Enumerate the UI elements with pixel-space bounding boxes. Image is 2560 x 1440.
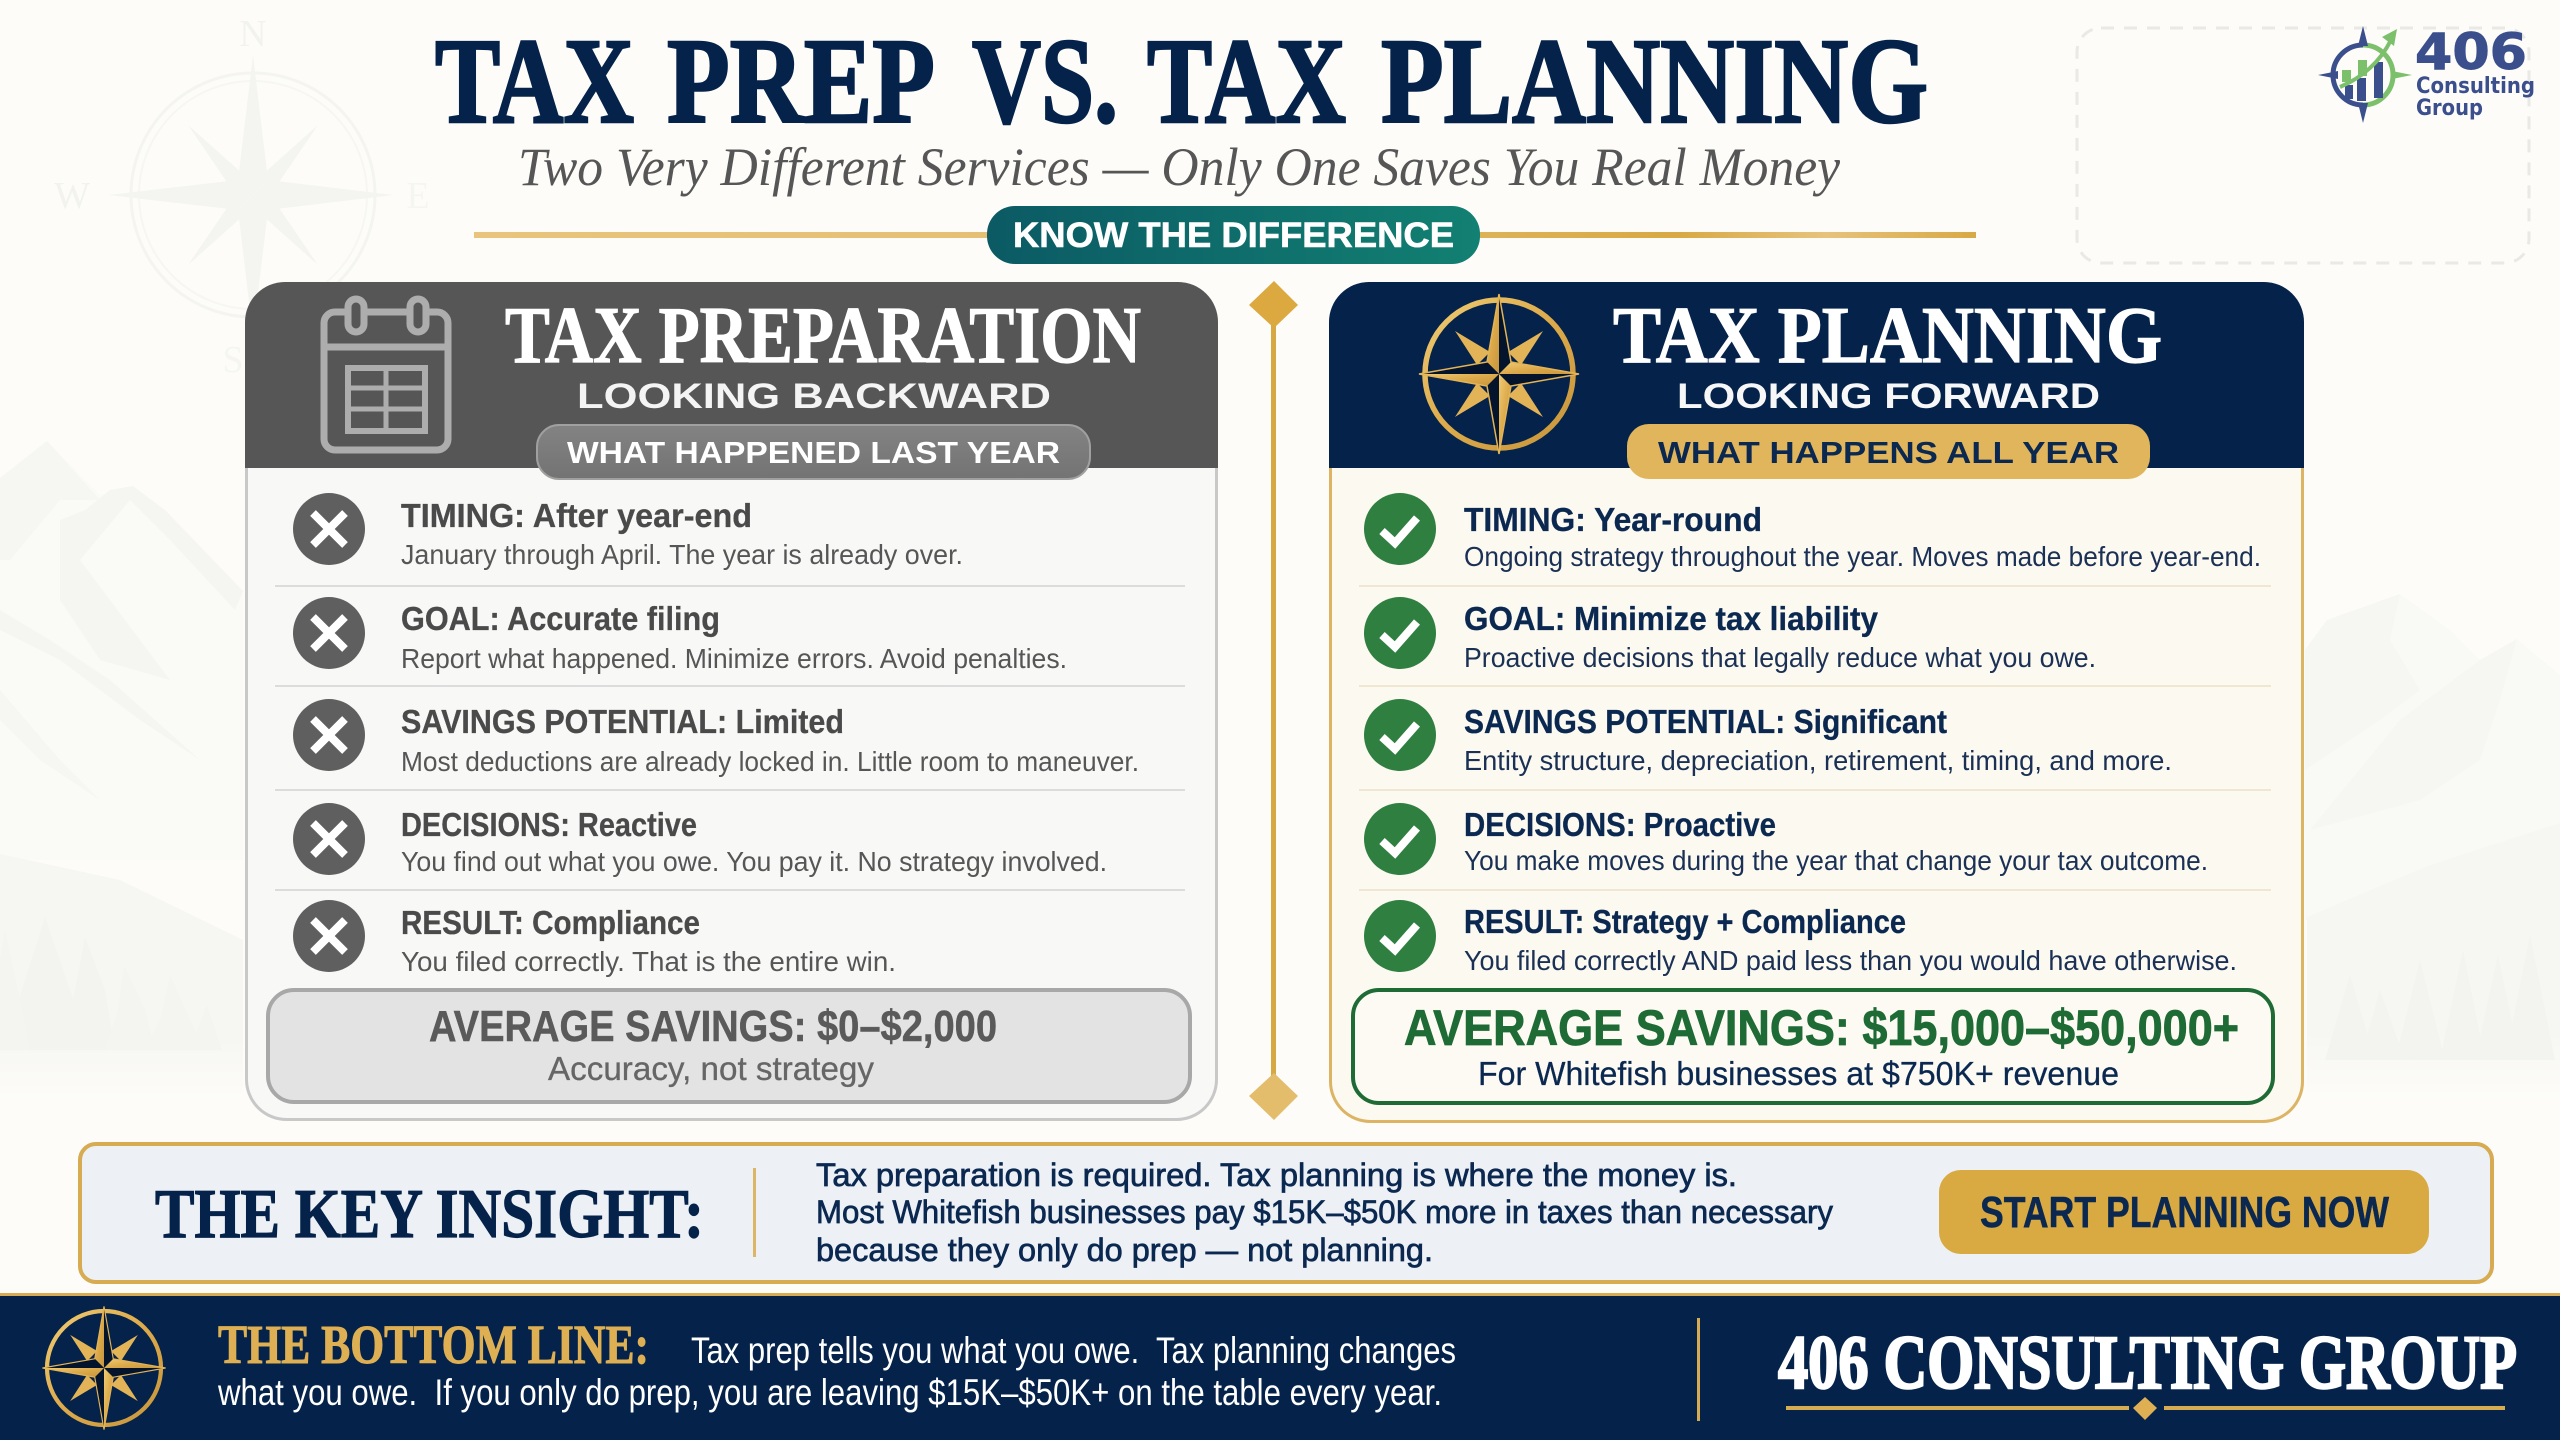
row: timing: January through April. The year is already over. [401, 539, 963, 570]
callout: average savings [1353, 990, 2273, 1103]
row: decisions: You find out what you owe. You pay it. No strategy involved. [401, 846, 1107, 877]
pill: what happens all year: WHAT HAPPENS ALL YEAR [1658, 435, 2119, 470]
heading: tax planning: TAX PLANNING [1613, 292, 2162, 380]
row: goal: Proactive decisions that legally reduce what you owe. [1464, 642, 2096, 673]
row: savings potential [293, 699, 1139, 777]
row: decisions: DECISIONS: Reactive [401, 806, 697, 843]
pill: what happened last year: WHAT HAPPENED LAST YEAR [567, 435, 1060, 470]
row: savings potential [1364, 699, 2172, 776]
row: savings potential: Most deductions are already locked in. Little room to maneuver. [401, 746, 1139, 777]
callout: average savings [268, 990, 1190, 1102]
center divider with diamonds [1249, 281, 1298, 1120]
row: savings potential: SAVINGS POTENTIAL: Limited [401, 703, 844, 740]
row: result [293, 900, 896, 977]
row: timing: TIMING: After year-end [401, 497, 752, 534]
logo: 406 Consulting Group: Group [2416, 96, 2483, 121]
logo: 406 Consulting Group: Consulting [2416, 74, 2535, 99]
text block: bottom line: Tax prep tells you what you owe. Tax planning changes [691, 1330, 1456, 1371]
divider rule with badge [474, 206, 1976, 264]
text block: insight: because they only do prep — not planning. [816, 1232, 1433, 1268]
row: result [1364, 900, 2237, 976]
row: result: You filed correctly. That is the entire win. [401, 946, 896, 977]
row: decisions: You make moves during the year that change your tax outcome. [1464, 845, 2208, 876]
callout: average savings: For Whitefish businesses at $750K+ revenue [1478, 1055, 2119, 1092]
logo: 406 Consulting Group [2318, 23, 2535, 123]
row: goal: GOAL: Accurate filing [401, 600, 720, 637]
button: start planning now [1939, 1170, 2429, 1254]
row: timing [293, 493, 963, 570]
watermark: compass: E [406, 175, 430, 217]
row: decisions: DECISIONS: Proactive [1464, 806, 1776, 843]
row: result: You filed correctly AND paid less than you would have otherwise. [1464, 945, 2237, 976]
icon: logo compass [2318, 26, 2412, 123]
panel body [246, 284, 1216, 1120]
title: PLANNING [1381, 14, 1928, 149]
panel: tax planning [1329, 282, 2304, 1122]
row: timing: Ongoing strategy throughout the year. Moves made before year-end. [1464, 541, 2261, 572]
callout: average savings: Accuracy, not strategy [548, 1050, 874, 1087]
icon: gold compass [1419, 294, 1579, 454]
icon: small gold compass [42, 1306, 166, 1430]
icon: calendar [324, 299, 448, 450]
divider [1697, 1318, 1700, 1421]
panel header [1329, 282, 2304, 479]
subtitle: Two Very Different Services — Only One Saves You Real Money [518, 137, 1840, 197]
subheading: looking backward: LOOKING BACKWARD [577, 377, 1051, 416]
empty dashed placeholder [2077, 28, 2529, 263]
title [435, 14, 1928, 149]
row: savings potential: Entity structure, depreciation, retirement, timing, and more. [1464, 745, 2172, 776]
text block: insight: Tax preparation is required. Tax planning is where the money is. [816, 1157, 1737, 1193]
panel body [1330, 284, 2302, 1122]
heading: the key insight: THE KEY INSIGHT: [155, 1176, 704, 1253]
title: TAX [435, 14, 634, 149]
text block: bottom line [217, 1330, 1456, 1413]
watermark: compass [54, 13, 430, 381]
subheading: looking forward: LOOKING FORWARD [1677, 377, 2100, 416]
panel header [245, 282, 1218, 479]
title: PREP [667, 14, 935, 149]
text block: insight: Most Whitefish businesses pay $15K–$50K more in taxes than necessary [816, 1194, 1833, 1230]
heading: tax preparation: TAX PREPARATION [505, 292, 1141, 380]
divider [753, 1168, 756, 1257]
panel: tax preparation [245, 282, 1218, 1120]
watermark: compass: S [222, 339, 244, 381]
logo: 406 Consulting Group: 406 [2415, 23, 2527, 81]
text block: insight [816, 1157, 1833, 1268]
callout: average savings: AVERAGE SAVINGS: $0–$2,000 [429, 1002, 997, 1051]
row: decisions [293, 803, 1107, 877]
panel: key insight [80, 1144, 2492, 1282]
pill: what happened last year [537, 425, 1090, 479]
row: result: RESULT: Compliance [401, 904, 700, 941]
row dividers [1359, 586, 2271, 890]
watermark: compass: N [239, 13, 267, 55]
row: timing: TIMING: Year-round [1464, 501, 1762, 538]
text block: bottom line: what you owe. If you only do prep, you are leaving $15K–$50K+ on the table every year. [217, 1372, 1442, 1413]
row: goal: Report what happened. Minimize errors. Avoid penalties. [401, 643, 1067, 674]
pill: what happens all year [1627, 424, 2150, 479]
title: VS. [972, 14, 1118, 149]
badge: know the difference [987, 206, 1480, 264]
watermark: left mountains [0, 441, 243, 1100]
row: result: RESULT: Strategy + Compliance [1464, 903, 1906, 940]
row dividers [275, 586, 1185, 890]
watermark: right mountains [2305, 594, 2560, 1100]
row: goal [293, 597, 1067, 674]
title: TAX [1147, 14, 1346, 149]
watermark: compass: W [54, 175, 90, 217]
button: start planning now: START PLANNING NOW [1980, 1188, 2389, 1237]
footer band [0, 1293, 2560, 1440]
row: goal: GOAL: Minimize tax liability [1464, 600, 1879, 637]
row: decisions [1364, 803, 2208, 876]
heading: the bottom line: THE BOTTOM LINE: [218, 1314, 649, 1375]
callout: average savings: AVERAGE SAVINGS: $15,000–$50,000+ [1404, 1000, 2239, 1056]
row: savings potential: SAVINGS POTENTIAL: Significant [1464, 703, 1947, 740]
badge: know the difference: KNOW THE DIFFERENCE [1013, 216, 1454, 255]
row: timing [1364, 493, 2261, 572]
row: goal [1364, 597, 2096, 673]
